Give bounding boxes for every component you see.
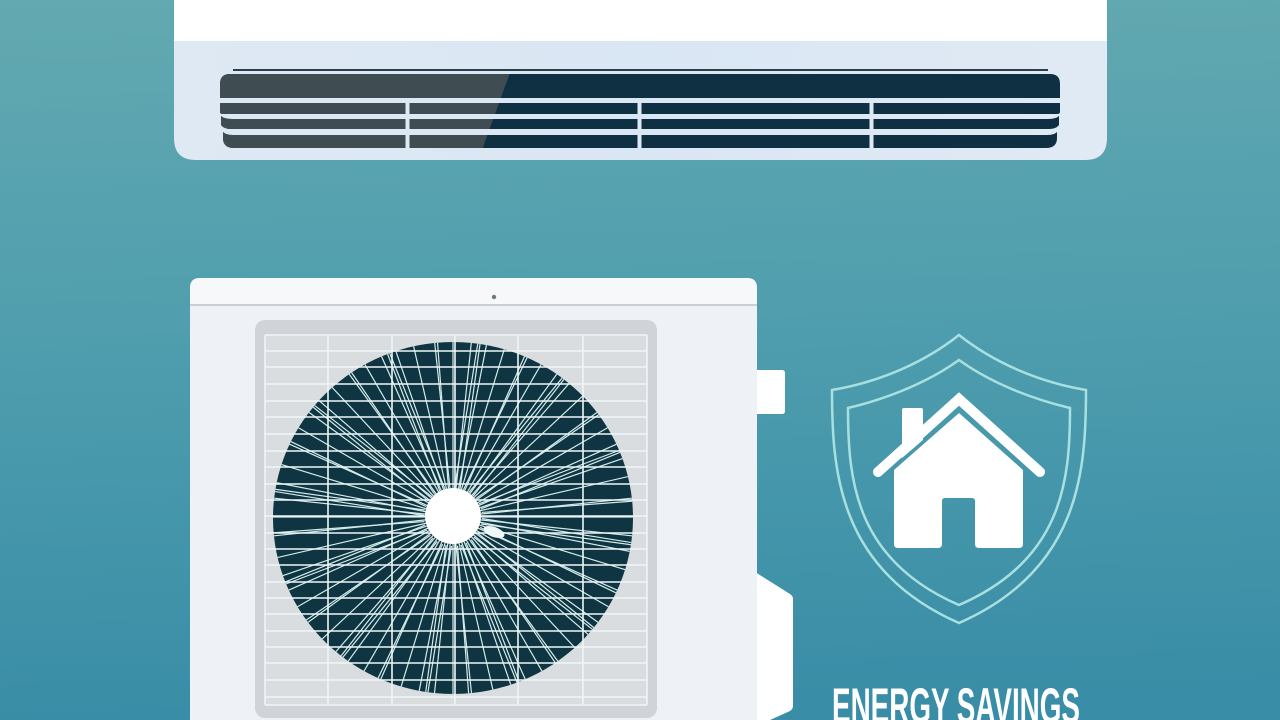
grille panel xyxy=(255,320,657,718)
chimney xyxy=(902,408,923,458)
outdoor unit side valve cover xyxy=(755,572,793,720)
fan disc xyxy=(273,342,633,694)
indoor unit white top panel xyxy=(174,0,1107,41)
casing screw xyxy=(492,295,496,299)
fan blade rays xyxy=(273,342,633,694)
icon: shield with house xyxy=(832,335,1086,623)
house icon xyxy=(878,399,1040,548)
grille wires xyxy=(265,335,647,705)
house body with door xyxy=(894,413,1023,548)
outdoor condenser unit xyxy=(190,278,757,720)
indoor unit body xyxy=(174,0,1107,160)
casing top cap xyxy=(190,278,757,304)
hub highlight xyxy=(482,524,506,540)
roof xyxy=(878,399,1040,472)
indoor air conditioner unit xyxy=(174,0,1107,160)
outdoor unit casing xyxy=(190,278,757,720)
shield inner outline xyxy=(848,360,1070,605)
air vent louvers xyxy=(220,70,1060,150)
shield outer outline xyxy=(832,335,1086,623)
outdoor unit side connector xyxy=(757,370,785,414)
vent top edge xyxy=(233,69,1048,71)
fan hub xyxy=(425,488,481,544)
